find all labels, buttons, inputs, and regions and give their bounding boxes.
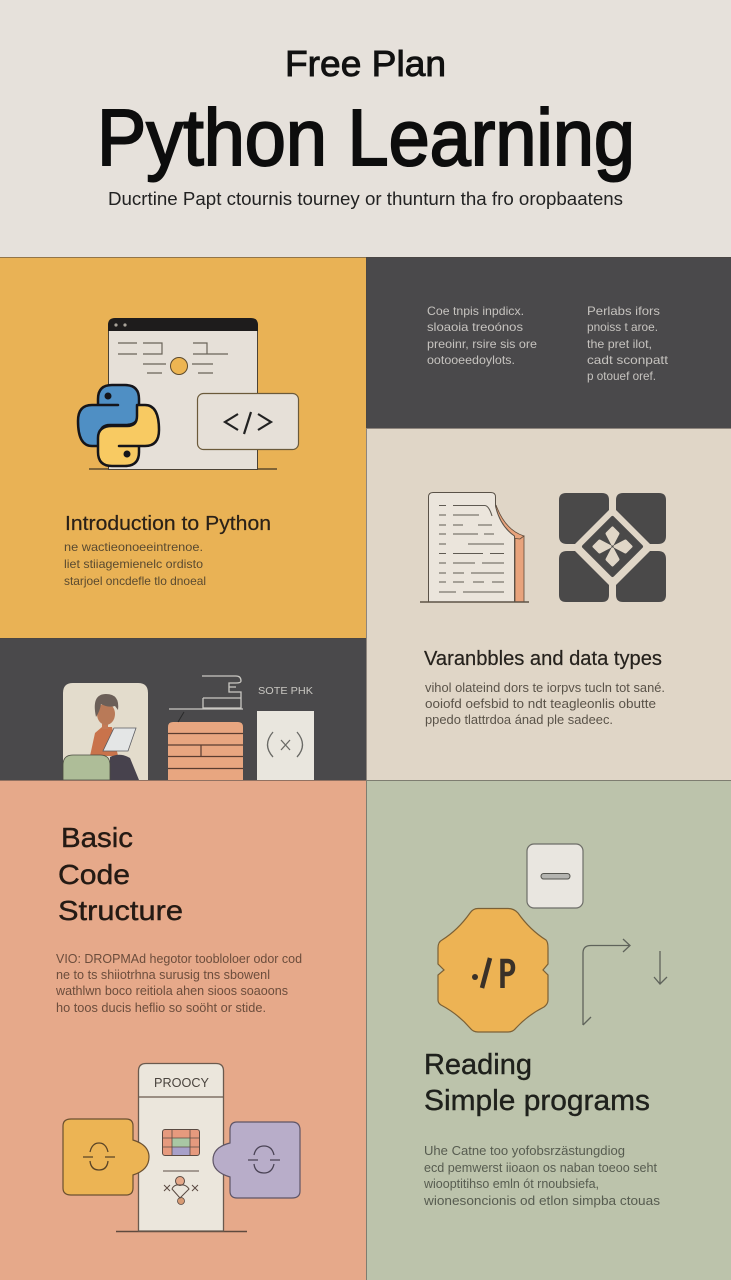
icon: yellow badge: [438, 908, 548, 1032]
heading: basic code structure: Basic: [61, 822, 133, 853]
heading: reading simple programs: Reading: [424, 1049, 532, 1081]
text column: left: [427, 304, 537, 367]
icon: code tag box: [198, 394, 298, 450]
label: SOTE PHK: SOTE PHK: [258, 686, 313, 697]
text block: code structure: wathlwn boco reitiola ahen sioos soaoons: [55, 984, 288, 998]
text block: introduction: liet stiiagemienelc ordisto: [64, 557, 203, 571]
text block: introduction: ne wactieonoeeintrenoe.: [64, 540, 203, 554]
heading: variables: Varanbbles and data types: [424, 648, 662, 670]
icon: Python logo: [78, 385, 159, 466]
text column: left: preoinr, rsire sis ore: [427, 337, 537, 351]
arrow: down: [654, 951, 667, 984]
panel: dark illustration: [0, 638, 366, 780]
illustration: program card: [116, 1064, 247, 1232]
text block: reading programs: Uhe Catne too yofobsrzästungdiog: [424, 1144, 625, 1158]
text column: right: cadt sconpatt: [587, 353, 669, 367]
text block: variables: ppedo tlattrdoa ánad ple sadeec.: [425, 713, 613, 727]
icon: diamond grid: [559, 493, 666, 602]
icon: purple puzzle piece: [213, 1122, 300, 1198]
text block: introduction: [64, 540, 206, 588]
title: Python Learning: [97, 93, 635, 182]
heading: reading simple programs: Simple programs: [424, 1085, 650, 1117]
illustration: person reading: [63, 683, 148, 780]
subtitle heading: Free Plan: Free Plan: [285, 43, 446, 84]
text block: code structure: VIO: DROPMAd hegotor toobloloer odor cod: [56, 952, 302, 966]
text column: right: Perlabs ifors: [587, 304, 660, 318]
panel: header: [0, 0, 731, 257]
text column: right: p otouef oref.: [587, 369, 656, 383]
text column: right: [587, 304, 669, 383]
icon: minus card: [527, 844, 583, 908]
text column: left: Coe tnpis inpdicx.: [427, 304, 524, 318]
text block: variables: [425, 681, 665, 727]
text column: right: pnoiss t aroe.: [587, 320, 658, 334]
text block: variables: ooiofd oefsbid to ndt teagleonlis obutte: [425, 697, 656, 711]
illustration: formula card: [257, 711, 314, 780]
text block: reading programs: [423, 1144, 660, 1208]
icon: yellow puzzle piece: [63, 1119, 149, 1195]
icon: flow diagram: [164, 1176, 198, 1204]
icon: table: [162, 1130, 200, 1156]
heading: basic code structure: [58, 822, 183, 926]
text block: reading programs: wionesoncionis od etlon simpba ctouas: [423, 1194, 660, 1208]
text block: code structure: ne to ts shiiotrhna surusig tns sbowenl: [56, 968, 270, 982]
text block: variables: vihol olateind dors te iorpvs tucln tot sané.: [425, 681, 665, 695]
label: PROOCY: PROOCY: [154, 1075, 209, 1090]
text column: left: ootooeedoylots.: [427, 353, 515, 367]
text block: reading programs: wiooptitihso emln ót rnoubsiefa,: [423, 1177, 599, 1191]
text column: left: sloaoia treoónos: [427, 320, 523, 334]
arrow: elbow right: [583, 939, 630, 1025]
panel: introduction to Python: [0, 257, 366, 638]
heading: reading simple programs: [424, 1049, 650, 1117]
panel: dark notes: [366, 257, 731, 428]
panel: variables and data types: [366, 428, 731, 780]
illustration: bracket lines: [169, 676, 243, 709]
text column: right: the pret ilot,: [587, 337, 652, 351]
icon: document: [420, 492, 529, 602]
heading: basic code structure: Structure: [58, 895, 183, 926]
tagline: Ducrtine Papt ctournis tourney or thunturn tha fro oropbaatens: [108, 189, 623, 209]
illustration: brick stack: [168, 712, 243, 780]
text block: code structure: [55, 952, 302, 1015]
text block: introduction: starjoel oncdefle tlo dnoeal: [64, 574, 206, 588]
text block: reading programs: ecd pemwerst iioaon os naban toeoo seht: [424, 1161, 658, 1175]
icon: code window: [89, 318, 277, 470]
heading: basic code structure: Code: [58, 859, 130, 890]
text block: code structure: ho toos ducis heflio so soöht or stide.: [56, 1001, 266, 1015]
panel: basic code structure: [0, 780, 366, 1280]
heading: introduction: Introduction to Python: [65, 513, 271, 535]
panel: reading simple programs: [366, 780, 731, 1280]
